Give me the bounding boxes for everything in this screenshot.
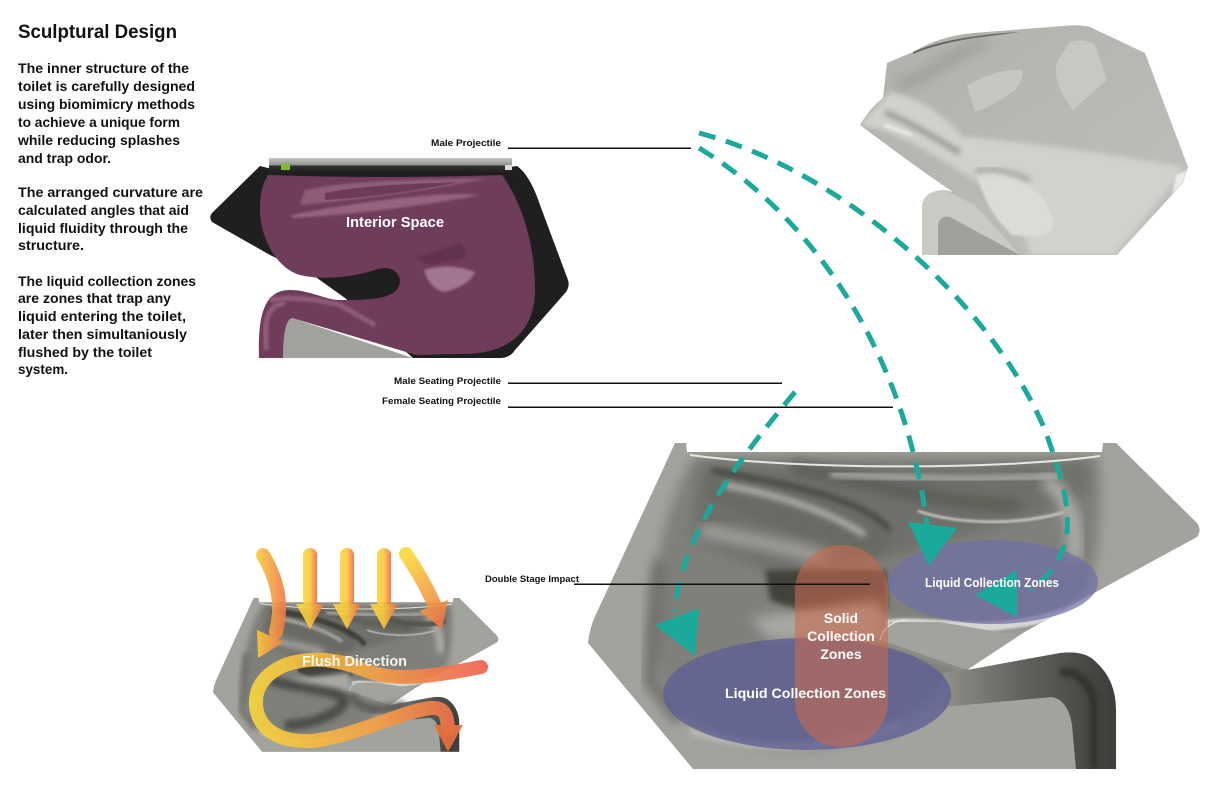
purple highlights	[266, 178, 490, 350]
water arrow 4	[370, 548, 398, 629]
dark outer shell	[210, 166, 569, 358]
grey base under drain	[283, 318, 413, 358]
text block: description: flushed by the toilet	[18, 344, 152, 360]
label: solid zone: Collection	[807, 628, 875, 644]
leader: male seating projectile: Male Seating Projectile	[394, 376, 501, 387]
flush path	[256, 660, 481, 741]
labels on large toilet	[725, 575, 1059, 701]
water arrow 1	[257, 555, 284, 658]
dashed trajectory: male projectile outer	[699, 133, 1068, 590]
illustration: large toilet section	[588, 443, 1200, 769]
text block: description	[17, 60, 203, 377]
projectile arrows	[655, 133, 1068, 656]
label: solid zone: Zones	[820, 646, 862, 662]
text block: description: later then simultaniously	[18, 326, 187, 342]
text block: description: to achieve a unique form	[18, 114, 180, 130]
ceramic body section	[588, 443, 1200, 769]
solid collection zone	[795, 545, 888, 747]
liquid collection zone: lower	[663, 638, 951, 750]
label: upper liquid zone: Liquid Collection Zones	[925, 575, 1059, 590]
text block: description: system.	[18, 361, 68, 377]
arrowhead: inner	[908, 522, 957, 566]
text block: description: structure.	[18, 237, 84, 253]
leader: male projectile: Male Projectile	[431, 138, 501, 149]
label: solid zone	[807, 610, 875, 662]
liquid collection zone: upper	[888, 540, 1098, 624]
illustration: exterior toilet view	[860, 25, 1188, 255]
arrowhead: outer	[975, 570, 1017, 617]
text block: description: liquid entering the toilet,	[18, 308, 186, 324]
seat rim	[269, 158, 512, 172]
text block: description: The liquid collection zones	[18, 273, 196, 289]
text block: description: are zones that trap any	[18, 290, 171, 306]
exterior shading	[860, 32, 1188, 255]
water arrow 2	[296, 548, 324, 629]
arrowhead: seating	[655, 608, 699, 656]
water arrow 3	[333, 548, 361, 629]
purple interior volume	[259, 175, 535, 358]
leader: female seating projectile: Female Seating Projectile	[382, 396, 501, 407]
text block: description: toilet is carefully designed	[18, 78, 195, 94]
text block: description: The inner structure of the	[18, 60, 189, 76]
water arrow 5	[406, 554, 448, 629]
label: solid zone: Solid	[824, 610, 858, 626]
exterior body	[860, 25, 1188, 255]
small toilet contrast shading	[270, 612, 445, 725]
text block: description: calculated angles that aid	[18, 202, 189, 218]
text block: description: liquid fluidity through the	[18, 220, 188, 236]
small toilet section	[213, 598, 498, 752]
illustration: flush direction	[213, 548, 498, 752]
illustration: interior space toilet section	[210, 158, 569, 358]
label: interior space: Interior Space	[346, 215, 444, 231]
title: Sculptural Design	[18, 22, 177, 43]
dashed trajectory: seating projectile	[675, 392, 795, 612]
text block: description: while reducing splashes	[17, 132, 180, 148]
label: flush direction: Flush Direction	[302, 654, 407, 670]
flush arrowhead	[434, 725, 463, 752]
label: lower liquid zone: Liquid Collection Zones	[725, 685, 886, 701]
text block: description: using biomimicry methods	[18, 96, 195, 112]
text block: description: and trap odor.	[18, 150, 111, 166]
dashed trajectory: male projectile inner	[699, 148, 927, 525]
leader: double stage impact: Double Stage Impact	[485, 574, 580, 585]
text block: description: The arranged curvature are	[18, 184, 203, 200]
